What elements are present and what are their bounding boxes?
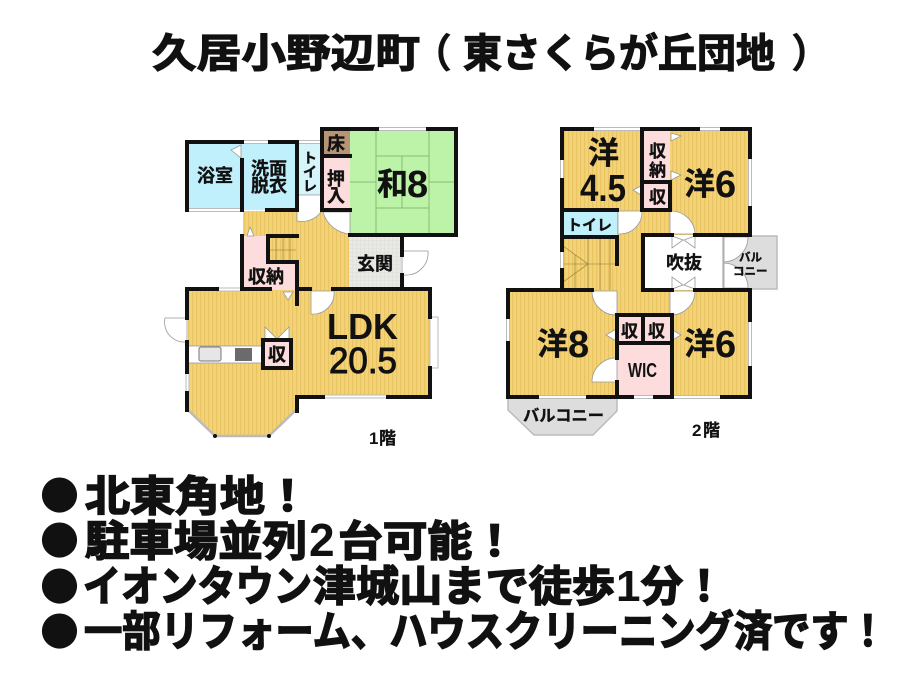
room: oshiire closet: 押: [327, 165, 345, 191]
title: [152, 21, 831, 79]
room: western 6 lower: 洋: [684, 319, 715, 364]
room: storage: [243, 236, 296, 290]
room: toilet: [297, 142, 322, 196]
room: western 4.5: 洋: [588, 128, 619, 173]
room: oshiire closet: [322, 156, 350, 210]
room: western 4.5: 4.5: [580, 168, 626, 210]
room: washroom: 脱衣: [251, 172, 287, 198]
feature 3: 1: [616, 562, 640, 611]
feature 2: [40, 508, 517, 569]
room: storage: 収納: [248, 263, 284, 289]
room: closets pair: 収: [621, 317, 638, 342]
room: toilet: ト: [303, 148, 317, 168]
feature 2: 2: [309, 514, 335, 566]
room: oshiire closet: 入: [327, 182, 345, 208]
floor label: 1F: 階: [379, 424, 396, 449]
stairs: [563, 238, 617, 290]
feature 3: イオンタウン: [83, 553, 312, 614]
title: 東さくらが丘団地: [463, 21, 775, 79]
room: western 6 upper: 6: [715, 164, 736, 206]
feature 4: ●: [40, 602, 79, 658]
floor label: 1F: [369, 424, 396, 449]
floor plan: 2nd floor: [506, 128, 777, 441]
floor label: 2F: 2: [692, 421, 701, 440]
room: washroom: [242, 142, 297, 210]
room: LDK: 20.5: [329, 340, 397, 381]
feature 2: ●: [40, 511, 79, 567]
doors and windows 1F: [165, 128, 438, 438]
room: washroom: 洗面: [251, 155, 287, 181]
floor plan: 1st floor: [165, 128, 456, 449]
room: closet: 収: [649, 137, 666, 162]
hall 2F: [617, 210, 670, 315]
room: tatami 8: [350, 129, 455, 235]
walls 1F: [187, 129, 456, 411]
room: western 6 lower: 6: [715, 324, 736, 366]
room: WIC: WIC: [628, 360, 657, 382]
room: closet: 納: [649, 156, 666, 181]
room: tatami 8: 和: [377, 159, 408, 204]
closet in LDK: [263, 327, 291, 368]
floor label: 2F: 階: [703, 416, 720, 441]
floor label: 2F: [692, 416, 720, 441]
walls 2F: [508, 129, 750, 397]
room: western 4.5: [562, 128, 642, 210]
room: western 6 lower: [670, 290, 750, 397]
room: tokonoma: 床: [327, 130, 345, 156]
room: entrance: [349, 235, 401, 289]
hall: [243, 195, 350, 290]
feature 1: ●: [40, 466, 79, 522]
feature list: [40, 463, 887, 659]
void: [643, 236, 723, 289]
closet in LDK: 収: [268, 341, 286, 367]
room: western 8: 洋: [537, 319, 568, 364]
room: small closet: [642, 182, 670, 210]
room: toilet 2F: トイレ: [567, 214, 612, 235]
kitchen counter: [188, 346, 263, 363]
balcony small: コニー: [733, 263, 768, 279]
room: small closet: 収: [649, 183, 666, 208]
title: 久居小野辺町: [152, 21, 420, 79]
feature 3: ●: [40, 557, 79, 613]
room: closets pair: [617, 316, 670, 343]
room: LDK: LDK: [327, 306, 398, 347]
room: WIC: [617, 343, 670, 397]
room: bath: [187, 142, 242, 210]
balcony large: [508, 397, 617, 435]
floor label: 1F: 1: [369, 429, 378, 448]
room: western 6 upper: 洋: [684, 159, 715, 204]
feature 1: 北東角地！: [85, 463, 310, 524]
room: LDK: [188, 290, 430, 436]
feature 2: 駐車場並列: [85, 508, 307, 569]
room: western 8: 8: [568, 324, 589, 366]
room: western 6 upper: [670, 129, 750, 235]
room: toilet: レ: [303, 176, 317, 196]
room: tatami 8: 8: [407, 164, 428, 206]
room: western 8: [508, 290, 617, 397]
room: entrance: 玄関: [357, 250, 393, 276]
room: toilet: イ: [303, 162, 317, 182]
doors and windows 2F: [506, 128, 752, 398]
title: （: [412, 21, 452, 79]
void: 吹抜: [666, 249, 702, 275]
balcony large: バルコニー: [523, 402, 604, 426]
feature 3: 津城山まで徒歩: [313, 553, 615, 614]
room: tokonoma: [322, 129, 350, 156]
feature 3: [40, 553, 725, 614]
balcony small: [723, 236, 777, 289]
room: bath: 浴室: [197, 162, 233, 188]
feature 3: 分！: [641, 553, 725, 614]
room: closet: [642, 129, 670, 182]
feature 2: 台可能！: [338, 508, 517, 569]
title: ）: [791, 21, 831, 79]
balcony small: バル: [739, 249, 762, 265]
room: closets pair: 収: [648, 317, 665, 342]
